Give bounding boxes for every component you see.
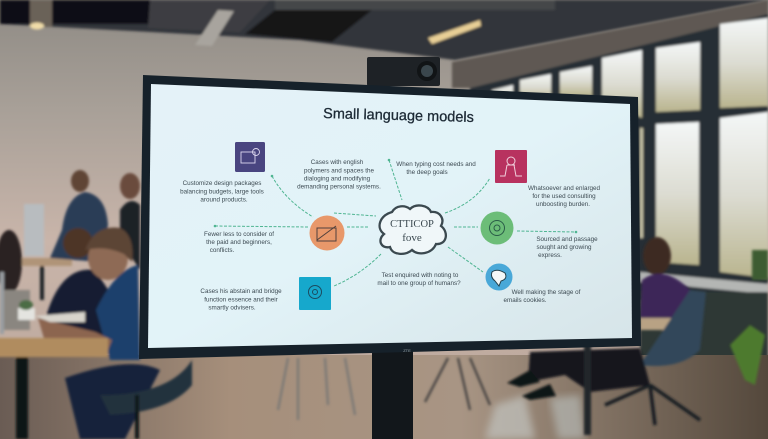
text: top center left: Cases with english xyxy=(311,159,364,166)
icon: green circle xyxy=(480,212,514,244)
brand mark on bezel: ZTE xyxy=(403,348,411,353)
monitor stand xyxy=(372,350,413,439)
text: top center left xyxy=(297,159,381,190)
text: middle right: express. xyxy=(538,252,562,259)
ceiling xyxy=(0,0,768,60)
text: top left: around products. xyxy=(200,196,248,204)
text: top right: unboosting burden. xyxy=(536,201,590,208)
floor xyxy=(0,355,768,439)
text: top left: Customize design packages xyxy=(183,180,261,187)
central cloud node: fove xyxy=(402,232,422,244)
text: bottom center xyxy=(377,272,461,287)
central cloud node: CTTICOP xyxy=(390,219,434,230)
text: middle left xyxy=(204,231,274,254)
people and furniture on the right xyxy=(278,237,768,435)
text: top center left: demanding personal systems. xyxy=(297,184,381,190)
text: bottom left: smartly odvisers. xyxy=(208,304,256,312)
text: middle left: the paid and beginners, xyxy=(206,239,272,246)
text: bottom right: emails cookies. xyxy=(503,297,547,304)
text: top right: for the used consulting xyxy=(532,193,596,200)
text: top center right xyxy=(396,161,476,176)
text: bottom left: Cases his abstain and bridge xyxy=(200,288,282,295)
icon: orange circle xyxy=(310,216,344,250)
text: top center right: the deep goals xyxy=(406,169,448,176)
webcam xyxy=(367,57,440,86)
text: bottom center: mail to one group of humans? xyxy=(377,280,461,287)
text: middle left: conflicts. xyxy=(210,247,234,254)
text: middle left: Fewer less to consider of xyxy=(204,231,274,238)
icon: blue circle xyxy=(486,264,512,290)
text: top center right: When typing cost needs and xyxy=(396,161,476,168)
icon: purple square, top left xyxy=(235,142,265,172)
display frame xyxy=(139,75,641,359)
connector arrows xyxy=(214,159,577,286)
text: top left xyxy=(180,180,264,204)
text: top center left: dialoging and modifying xyxy=(304,176,371,182)
icon: crimson square, top right xyxy=(495,150,527,183)
text: top left: balancing budgets, large tools xyxy=(180,188,264,196)
text: top right: Whatsoever and enlarged xyxy=(528,185,601,192)
icon: teal square, bottom left xyxy=(299,277,331,310)
text: middle right xyxy=(536,236,598,259)
central cloud node xyxy=(380,205,446,254)
text: bottom right: Well making the stage of xyxy=(512,289,581,296)
text: bottom left: function essence and their xyxy=(204,296,278,304)
text: top right xyxy=(528,185,601,208)
text: bottom center: Test enquired with noting to xyxy=(382,272,459,279)
text: bottom right xyxy=(503,289,581,304)
text: middle right: sought and growing xyxy=(537,244,592,251)
text: bottom left xyxy=(200,288,282,312)
right wall and windows xyxy=(452,0,768,387)
text: top center left: polymers and spaces the xyxy=(304,168,374,174)
text: middle right: Sourced and passage xyxy=(536,236,598,243)
title: Small language models xyxy=(323,106,474,126)
slide screen xyxy=(148,84,632,348)
people on the left xyxy=(0,170,192,439)
slide content xyxy=(180,106,601,312)
